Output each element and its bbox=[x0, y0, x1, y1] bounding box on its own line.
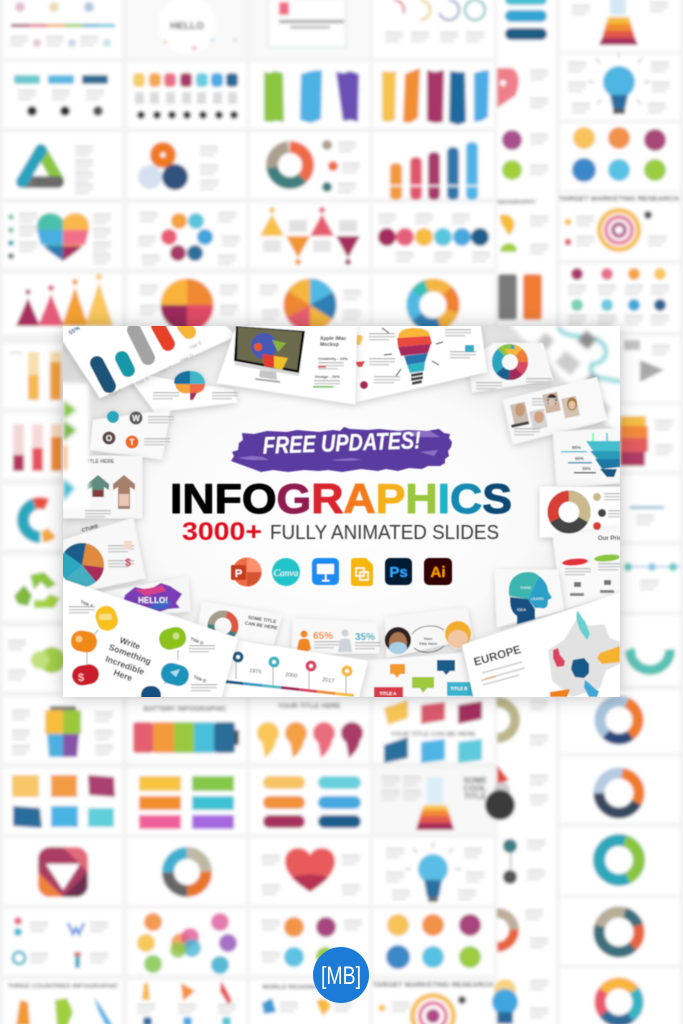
icon: orange figure bbox=[297, 630, 311, 654]
slide: funnel and title: COOL bbox=[463, 784, 487, 793]
chart: pie bbox=[71, 554, 93, 576]
slide: WOT circles bbox=[90, 410, 174, 459]
slide: pill chart: Title B bbox=[135, 376, 151, 388]
slide: target research: TARGET MARKETING RESEARCH bbox=[559, 194, 679, 203]
slide: donut title bbox=[197, 602, 282, 645]
photo: portrait one bbox=[510, 402, 529, 428]
slide: bookmark frame bbox=[268, 0, 346, 47]
slide: head diagram: LEARN bbox=[531, 597, 544, 601]
slide: timeline: 2017 bbox=[322, 677, 335, 685]
slide: battery infographic bbox=[133, 706, 239, 753]
slide: four portraits bbox=[503, 377, 607, 444]
slide: head diagram bbox=[495, 570, 564, 627]
slide: percent figures bbox=[292, 619, 381, 654]
logo: MB badge bbox=[313, 947, 369, 1003]
slide: geography blobs bbox=[497, 200, 548, 254]
slide: write something bubbles: Title D bbox=[190, 636, 205, 646]
slide: pill chart: Title E bbox=[188, 340, 204, 352]
icon: PowerPoint: P bbox=[235, 568, 242, 580]
icon: teal bubble bbox=[159, 661, 191, 688]
text: write something incredible here: Write bbox=[118, 635, 142, 652]
slide: light bulb bbox=[568, 53, 670, 114]
icon: Illustrator: Ai bbox=[430, 564, 446, 581]
title: infographics: INFOGRAPHICS bbox=[170, 475, 512, 522]
slide: four blobs bbox=[262, 917, 362, 967]
slide: iMac mockup bbox=[217, 324, 357, 404]
slide: quarter pie bbox=[140, 285, 238, 318]
slide: heart bbox=[8, 213, 111, 264]
icon: red bubble: $ bbox=[78, 672, 84, 684]
icon: Google Slides bbox=[351, 558, 373, 586]
slide: rainbow cluster bbox=[137, 913, 237, 974]
photo: child in yellow hat bbox=[445, 621, 471, 648]
slide: right strip blue text bbox=[624, 506, 680, 590]
slide: hello splash: HELLO! bbox=[138, 596, 168, 605]
photo: portrait two bbox=[529, 409, 548, 430]
slide: seven tabs bbox=[133, 73, 238, 119]
slide: speech banners: YOUR TITLE CAN BE HERE bbox=[390, 731, 476, 738]
icon: PowerPoint bbox=[231, 558, 262, 586]
slide: percent figures: 35% bbox=[355, 632, 375, 643]
slide: funnel and title bbox=[382, 776, 487, 830]
slide: title with house arrows: TITLE HERE bbox=[85, 459, 115, 465]
slide: iMac mockup: Creativity - 10% bbox=[318, 356, 348, 361]
slide: brush columns three bbox=[264, 70, 359, 123]
slide: bulb lower bbox=[386, 842, 484, 902]
slide: Europe map: EUROPE bbox=[473, 644, 523, 669]
slide: brain puzzle bbox=[125, 371, 238, 412]
slide: up and down triangles bbox=[260, 207, 360, 265]
text: free updates: FREE UPDATES! bbox=[262, 427, 421, 460]
slide: brush columns five bbox=[382, 68, 489, 125]
main panel background bbox=[63, 326, 620, 697]
slide: three circles bbox=[138, 142, 218, 190]
slide: donut title: CAN BE HERE bbox=[244, 620, 279, 632]
icon: yellow bubble bbox=[92, 603, 121, 634]
slide: quote marks: YOUR TITLE HERE bbox=[277, 703, 341, 710]
slide: world regions: WORLD REGIONS bbox=[262, 984, 318, 991]
slide: triangle loop bbox=[22, 150, 58, 182]
slide: quote marks bbox=[257, 703, 363, 758]
chart: wheel bbox=[553, 496, 585, 528]
slide: pill chart: Title A bbox=[108, 388, 124, 400]
slide: dots and colour strip bbox=[10, 2, 115, 47]
text: write something incredible here: Here bbox=[112, 667, 134, 683]
slide: donut chart bbox=[272, 140, 360, 193]
chart: segmented wheel bbox=[497, 349, 523, 375]
slide: target lower: TARGET MARKETING RESEARCH bbox=[373, 980, 493, 989]
slide: world regions bbox=[262, 984, 352, 1016]
icon: red bubble bbox=[70, 663, 101, 687]
icon: gray figure bbox=[338, 629, 352, 652]
slide: write something bubbles bbox=[60, 578, 238, 708]
slide: hello: HELLO bbox=[170, 21, 204, 32]
slide: gray and orange bars bbox=[498, 274, 542, 320]
slide: seven-part ring bbox=[600, 983, 638, 1021]
slide: ring with plus bbox=[168, 853, 206, 891]
chart: funnel bbox=[586, 433, 620, 477]
slide: triangle text bbox=[75, 146, 93, 194]
slide: timeline: 1975 bbox=[249, 668, 262, 676]
slide: speech bubbles: TITLE A bbox=[380, 691, 397, 696]
slide: write something bubbles: Title A bbox=[80, 599, 95, 609]
slide: multi-colour ring bbox=[413, 285, 453, 325]
photo: portrait four bbox=[561, 396, 580, 418]
photo: portrait three bbox=[542, 392, 561, 413]
icon: navy bubble bbox=[141, 686, 161, 708]
slide: hello bbox=[158, 0, 236, 54]
slide: pie structure: $ bbox=[125, 557, 131, 569]
slide: funnel and title: SOME bbox=[463, 776, 487, 785]
slide: speech bubbles bbox=[358, 653, 474, 699]
slide: iMac mockup: Apple iMac bbox=[320, 336, 347, 342]
slide: speech bubbles: TITLE B bbox=[450, 686, 468, 691]
slide: our pricing: Our Pricing bbox=[598, 536, 631, 542]
slide: beige orange arc bbox=[480, 910, 548, 948]
slide: dark teal circles bbox=[503, 839, 545, 884]
slide: red heart bbox=[262, 848, 360, 895]
slide: funnel percentages: 35% bbox=[582, 466, 591, 471]
slide: pentagon ring bbox=[599, 773, 639, 813]
slide: eight dots bbox=[568, 268, 669, 325]
slide: our pricing bbox=[553, 527, 631, 610]
chart: timeline bar bbox=[225, 680, 354, 697]
slide: color wheel bbox=[470, 343, 553, 392]
slide: right strip stacked layers bbox=[620, 416, 673, 466]
slide: hello splash bbox=[105, 577, 190, 619]
slide: six rectangles bbox=[139, 776, 234, 829]
slide: battery infographic: BATTERY INFOGRAPHIC bbox=[143, 706, 227, 713]
slide: two kids bbox=[385, 608, 472, 658]
main panel: collage of slides bbox=[55, 320, 634, 708]
slide: six blobs bbox=[572, 127, 666, 182]
icon: segmented head bbox=[509, 572, 552, 624]
map: Europe countries bbox=[548, 611, 620, 697]
slide: ring orange navy bbox=[600, 701, 638, 739]
icon: layered bulb bbox=[397, 328, 432, 385]
slide: head diagram: IDEA bbox=[517, 608, 526, 612]
slide: left yellow bars bbox=[10, 352, 61, 400]
slide: six pills bbox=[263, 776, 361, 828]
slide: blurred top right with teal curve bbox=[509, 326, 620, 429]
slide: left green blob bbox=[8, 640, 65, 680]
slide: geography blobs: GEOGRAPHY bbox=[497, 200, 536, 206]
slide: funnel and title: TITLE bbox=[464, 792, 487, 801]
slide: pill chart: 55% bbox=[68, 325, 82, 337]
slide: pill chart: Title D bbox=[179, 353, 195, 365]
slide: funnel percentages: 85% bbox=[572, 445, 581, 450]
photo: iMac with parrot bbox=[234, 326, 305, 383]
slide: ring dark teal beige bbox=[599, 912, 639, 952]
slide: left red bars bbox=[13, 424, 62, 471]
slide: pills bbox=[505, 0, 547, 40]
slide: six paper blobs bbox=[12, 775, 115, 828]
icon: brain bbox=[174, 371, 205, 400]
slide: two kids: Your bbox=[424, 636, 433, 641]
icon: Photoshop bbox=[385, 558, 412, 585]
logo: MB badge: [MB] bbox=[321, 962, 361, 990]
slide: Europe map bbox=[462, 592, 622, 700]
slide: donut title: SOME TITLE bbox=[247, 615, 278, 625]
slide: WOT circles: T bbox=[130, 438, 135, 447]
slide: pie structure: CTURE bbox=[81, 524, 100, 534]
slide: blob pair bbox=[502, 130, 548, 180]
chart: pills bbox=[97, 326, 189, 386]
slide: title with house arrows bbox=[63, 456, 142, 518]
slide: right strip teal ring bbox=[628, 630, 670, 670]
slide: six country maps bbox=[137, 981, 236, 1024]
slide: rounded square diamond bbox=[38, 847, 88, 897]
slide: trash can bbox=[12, 706, 113, 757]
slide: bulb layers bbox=[340, 322, 487, 402]
text: write something incredible here: Something bbox=[107, 642, 153, 666]
slide: six blobs lower bbox=[386, 914, 481, 969]
text: write something incredible here: Incredible bbox=[104, 654, 146, 677]
icon: Canva bbox=[272, 558, 300, 586]
slide: right red and dark bbox=[485, 765, 548, 820]
slide: funnel percentages: 65% bbox=[575, 456, 584, 461]
slide: right strip gray arrows bbox=[624, 340, 670, 382]
slide: beige arc bbox=[479, 700, 548, 745]
slide: six-part pie bbox=[260, 285, 361, 320]
subtitle: 3000+ fully animated slides: FULLY ANIMATED SLIDES bbox=[270, 521, 499, 544]
slide: timeline: 2000 bbox=[285, 672, 298, 680]
slide: percent figures: 65% bbox=[313, 631, 333, 642]
slide: star ring bbox=[599, 840, 639, 880]
icon: orange bubble bbox=[69, 629, 99, 654]
slide: speech banners bbox=[384, 700, 482, 763]
slide: three country maps: THREE COUNTRIES INFOGRAPHIC bbox=[8, 983, 119, 990]
slide: WOT circles: W bbox=[132, 414, 140, 423]
badge: free updates brush bbox=[231, 427, 452, 472]
subtitle: 3000+ fully animated slides: 3000+ bbox=[182, 518, 262, 546]
icon: Keynote bbox=[312, 558, 339, 585]
icon: Photoshop: Ps bbox=[389, 564, 408, 581]
slide: target lower bbox=[373, 980, 493, 1024]
slide: hexagon ring bbox=[138, 212, 240, 265]
slide: WOT circles: O bbox=[106, 434, 112, 443]
slide: timeline bbox=[218, 640, 368, 701]
photo: girl with mask bbox=[385, 627, 411, 654]
slide: pill chart: Title C bbox=[158, 365, 174, 377]
slide: pink teardrop bbox=[497, 68, 548, 108]
slide: iMac mockup: Design - 20% bbox=[315, 374, 340, 379]
slide: funnel top bbox=[572, 0, 668, 45]
slide: six hexagons bbox=[378, 214, 490, 262]
slide: left recycling arrows bbox=[14, 572, 60, 608]
slide: blue cluster bbox=[492, 979, 548, 1024]
icon: Illustrator bbox=[424, 558, 452, 585]
slide: funnel percentages bbox=[553, 428, 620, 488]
icon: Canva: Canva bbox=[274, 569, 299, 579]
slide: four peaks bbox=[16, 274, 113, 326]
slide: pie structure bbox=[63, 518, 145, 596]
slide: four progress arcs bbox=[384, 0, 485, 42]
slide: four small icons bbox=[13, 917, 108, 968]
slide: head diagram: THINK bbox=[520, 586, 532, 590]
slide: three flags bbox=[14, 75, 108, 116]
slide: triangle wheel bbox=[540, 487, 634, 537]
slide: rising bars bbox=[385, 142, 483, 200]
slide: target research bbox=[559, 194, 679, 252]
slide: three country maps bbox=[8, 983, 119, 1024]
slide: two kids: Title Here bbox=[419, 641, 438, 646]
icon: green bubble bbox=[157, 625, 188, 652]
text: write something incredible here bbox=[104, 635, 153, 683]
subtitle: 3000+ fully animated slides bbox=[182, 518, 499, 546]
slide: pill chart bbox=[60, 324, 236, 400]
slide: iMac mockup: Mockup bbox=[320, 342, 339, 348]
slide: write something bubbles: Title E bbox=[193, 674, 207, 684]
slide: left C ring bbox=[23, 503, 57, 537]
slide: left blurred green arrows bbox=[63, 382, 92, 508]
